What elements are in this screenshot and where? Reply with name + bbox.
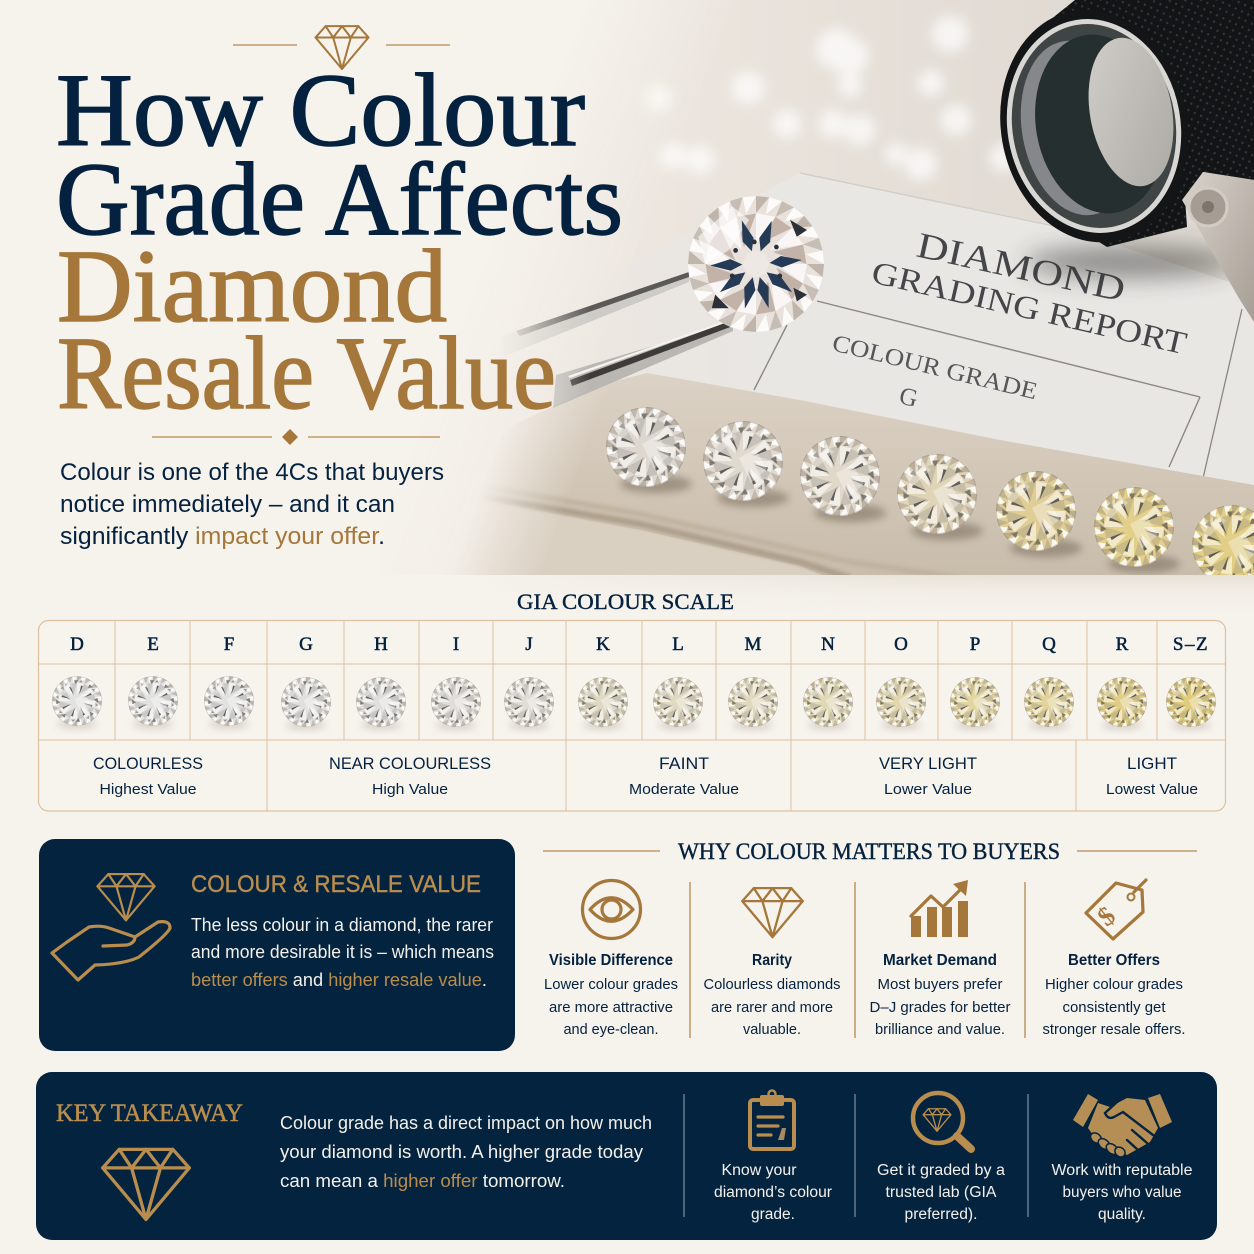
heading: GIA colour scale: GIA COLOUR SCALE [517,589,734,614]
panel: GIA colour scale table [38,620,1226,811]
grade letters: M [745,634,762,655]
takeaway text [280,1112,652,1191]
icon: hand holding diamond [52,874,170,980]
large diamond held in tweezers [688,196,824,332]
soft band below photo [672,575,1254,590]
column: visible difference: are more attractive [549,999,673,1016]
grading report card: G [897,383,920,413]
title divider [152,429,440,445]
grading report card [754,172,1254,485]
grade letters: E [147,634,159,655]
velvet tray [470,373,1254,575]
title: Grade Affects [56,142,623,257]
column: visible difference: Lower colour grades [544,976,678,993]
title: Resale Value [57,316,556,431]
grade letters: D [70,634,84,655]
column: market demand: D–J grades for better [870,999,1011,1016]
intro text: notice immediately – and it can [60,491,395,518]
tip: work with reputable buyers [1052,1094,1192,1223]
category labels: Moderate Value [629,781,739,798]
panel body text: The less colour in a diamond, the rarer [191,915,493,935]
hero photo: loupe, grading report, tweezers and diamonds [456,0,1254,575]
column: market demand [870,880,1011,1038]
grade letters: H [374,634,388,655]
icon: price tag [1086,880,1146,939]
category labels: COLOURLESS [93,754,203,773]
column: better offers: consistently get [1062,999,1166,1016]
grade letters: F [224,634,234,655]
grade letters: I [453,634,459,655]
intro text: significantly impact your offer. [60,523,385,550]
tip: know your grade: Know your [722,1162,796,1179]
grade letters: J [525,634,533,655]
column: rarity: are rarer and more [711,999,833,1016]
icon: eye [582,880,640,938]
column: rarity: Colourless diamonds [704,976,840,993]
column: visible difference: and eye-clean. [564,1021,658,1038]
tip: get it graded [877,1093,1005,1223]
panel: why colour matters columns [544,880,1186,1038]
title: Diamond [57,229,447,344]
intro text [60,459,444,550]
tip: know your grade: grade. [751,1206,795,1223]
panel body text: better offers and higher resale value. [191,970,487,990]
category labels: Highest Value [100,781,196,798]
icon: handshake [1073,1094,1172,1159]
tip: know your grade: diamond’s colour [714,1184,832,1201]
title: How Colour [56,53,585,168]
intro text: Colour is one of the 4Cs that buyers [60,459,444,486]
title [56,53,623,431]
grade letters: O [894,634,908,655]
category labels: VERY LIGHT [879,754,977,773]
grade letters: R [1116,634,1129,655]
column: market demand: Most buyers prefer [878,976,1003,993]
key takeaway heading: KEY TAKEAWAY [56,1100,243,1127]
heading: why colour matters to buyers: WHY COLOUR MATTERS TO BUYERS [678,839,1060,864]
panel: colour and resale value [39,839,515,1051]
grading report card: GRADING REPORT [868,254,1191,361]
category labels: Lowest Value [1106,781,1198,798]
icon: clipboard [750,1090,794,1149]
grade diamonds D to S–Z [47,671,1221,732]
grade letters [70,634,1209,655]
bokeh sparkles [645,16,1018,180]
grade letters: Q [1042,634,1056,655]
column: visible difference: Visible Difference [549,952,673,969]
column: rarity [704,888,840,1038]
column: better offers [1042,880,1186,1038]
category labels [93,754,1198,798]
column: rarity: valuable. [743,1021,801,1038]
grade letters: S–Z [1173,634,1209,655]
tip: work with reputable buyers: Work with reputable [1052,1162,1192,1179]
column: visible difference [544,880,678,1038]
column: better offers: stronger resale offers. [1042,1021,1186,1038]
jeweller's loupe [982,0,1254,322]
takeaway text: Colour grade has a direct impact on how much [280,1112,652,1133]
takeaway text: your diamond is worth. A higher grade today [280,1141,644,1162]
column: market demand: brilliance and value. [875,1021,1005,1038]
row of seven diamonds from white to yellow [606,407,1254,575]
grade letters: P [970,634,980,655]
category labels: FAINT [659,754,709,773]
column: better offers: Higher colour grades [1045,976,1183,993]
tip: work with reputable buyers: quality. [1098,1206,1146,1223]
grade letters: K [596,634,610,655]
column: rarity: Rarity [752,952,792,969]
tip: get it graded: Get it graded by a [877,1162,1005,1179]
grade letters: L [672,634,684,655]
tweezers [516,272,733,408]
panel: key takeaway [36,1072,1217,1240]
takeaway text: can mean a higher offer tomorrow. [280,1170,565,1191]
icon: large diamond [103,1149,189,1219]
category labels: NEAR COLOURLESS [329,754,491,773]
panel body text [191,915,494,990]
tip: get it graded: trusted lab (GIA [886,1184,997,1201]
icon: diamond [742,888,803,937]
icon: rising bar chart [911,880,968,937]
icon: magnifier over diamond [913,1093,971,1149]
panel body text: and more desirable it is – which means [191,942,494,962]
grading report card: DIAMOND [913,225,1129,309]
category labels: Lower Value [884,781,972,798]
grade letters: N [821,634,835,655]
icon: price tag: $ [1091,900,1121,932]
tip: work with reputable buyers: buyers who value [1062,1184,1182,1201]
column: better offers: Better Offers [1068,952,1160,969]
panel heading: COLOUR & RESALE VALUE [191,871,481,898]
grading report card: COLOUR GRADE [830,331,1040,405]
category labels: LIGHT [1127,754,1177,773]
category labels: High Value [372,781,448,798]
tip: know your grade [714,1090,832,1223]
icon: top diamond ornament [233,26,450,69]
tip: get it graded: preferred). [904,1206,978,1223]
grade letters: G [299,634,313,655]
column: market demand: Market Demand [883,952,997,969]
